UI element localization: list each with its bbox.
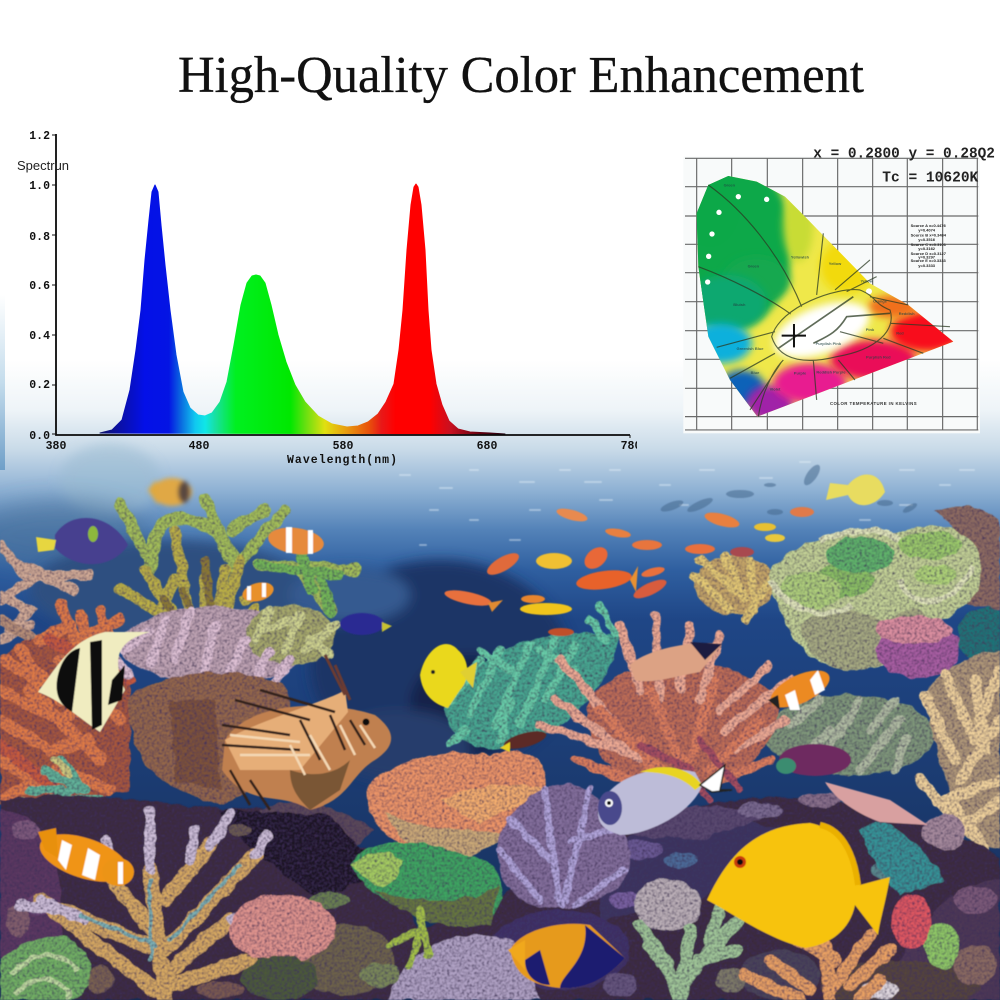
coral: teal right edge: [957, 607, 1000, 663]
left edge strip: [0, 295, 5, 470]
coral: green plate: [350, 842, 502, 926]
region names: Reddish: [899, 311, 915, 316]
coral: speckled mound: [634, 879, 702, 931]
coral: purple fan: [497, 784, 630, 909]
region names: Yellow: [829, 261, 842, 266]
y-axis labels: 0.8: [29, 231, 50, 244]
fish: rabbit fish: [630, 642, 722, 681]
fish: hawkfish: [825, 782, 928, 825]
coral: brown mass: [128, 672, 291, 805]
white-point cross: [782, 324, 806, 347]
coral: orange plate: [366, 752, 546, 856]
fish: anthias school: [443, 506, 814, 636]
coral: teal small: [30, 760, 100, 810]
illuminant list: Source B x=0.3484: [911, 233, 947, 238]
region names: Green: [748, 264, 760, 269]
y-axis labels: 1.2: [29, 130, 50, 143]
title: High-Quality Color Enhancement: [178, 47, 865, 104]
colour horseshoe: [696, 176, 954, 416]
region names: [724, 183, 915, 392]
white sample dots: [705, 194, 872, 294]
spectrum chart: [17, 130, 641, 467]
x-axis labels: 580: [333, 440, 353, 453]
coral: pale acropora: [20, 812, 268, 1000]
coral: orange branching left: [0, 632, 130, 810]
illuminant list: y=0.4074: [918, 228, 936, 233]
rock patches: [0, 802, 1000, 1000]
x-axis title: Wavelength(nm): [287, 454, 397, 467]
fish: moorish idol: [38, 632, 150, 732]
region names: Orange: [873, 299, 888, 304]
region names: Bluish: [733, 302, 746, 307]
coral: tan fingers right: [925, 650, 1000, 850]
coral: pink-orange branching: [540, 615, 790, 800]
fish: blue tang: [340, 613, 392, 635]
coral: green bottom ridges: [12, 956, 78, 998]
fish: powder blue tang: [598, 765, 732, 835]
y-axis ticks: [52, 135, 630, 438]
diagram grid: [685, 158, 978, 430]
fish: lionfish: [222, 655, 391, 810]
dark rock floor: [0, 796, 1000, 1000]
coral: pink-lilac table: [120, 607, 310, 683]
coral: yellow-tan small: [25, 760, 90, 820]
diagram paper: [683, 157, 980, 433]
fish: clown bottom left: [34, 825, 134, 891]
coral: large lettuce: [768, 526, 982, 670]
fish group: lively reef fish: [34, 475, 928, 988]
scene with soft photographic focus: [0, 475, 1000, 1000]
coral: green bottom: [0, 936, 90, 1000]
coral: pink brain: [229, 894, 335, 962]
coral: teal staghorn middle: [445, 633, 620, 750]
region names: Purple: [794, 370, 807, 375]
region names: Purplish Red: [866, 354, 891, 359]
colour temperature: Tc = 10620K: [882, 170, 979, 186]
fish: purple wrasse: [776, 744, 851, 776]
region names: Red: [896, 330, 904, 335]
y-axis title: Spectrun: [17, 158, 69, 173]
fish: clown right: [765, 663, 835, 715]
region names: Reddish Purple: [816, 369, 846, 374]
region names: Green: [724, 183, 736, 188]
coral: yellow-green staghorn: [120, 500, 355, 630]
fish: purple tang: [36, 518, 128, 564]
coral: light purple bottom: [388, 934, 540, 1000]
illuminant list: Source D x=0.3127: [911, 251, 947, 256]
x-axis labels: 780: [621, 440, 641, 453]
illuminant list: Source C x=0.3101: [911, 242, 947, 247]
y-axis labels: 0.0: [29, 430, 50, 443]
coral: red worm: [892, 894, 932, 950]
coral: left tan branches: [0, 545, 90, 640]
fish: small wrasse: [500, 728, 548, 752]
illuminant list: y=0.3333: [918, 263, 936, 268]
fish: yellow tang small: [420, 644, 477, 708]
fish: clown upper: [266, 524, 326, 558]
coral: green fingers: [640, 910, 738, 1000]
y-axis labels: 0.2: [29, 379, 50, 392]
x-axis labels: [46, 441, 637, 449]
spectrum curve: [100, 184, 505, 434]
region names: Yellowish: [791, 254, 810, 259]
coral: yellow tan: [695, 555, 775, 615]
x-axis labels: 680: [477, 440, 497, 453]
illuminant list: y=0.3162: [918, 246, 936, 251]
region names: Purplish Pink: [816, 341, 842, 346]
coral: teal-blue patch: [860, 822, 945, 895]
fish: orange distant: [148, 478, 192, 506]
coral: pink-purple right: [876, 622, 960, 678]
fish: blue-orange angelfish: [508, 924, 625, 988]
region names: Pink: [866, 327, 875, 332]
coral: yellow-green small: [390, 910, 428, 965]
y-axis labels: 0.4: [29, 330, 50, 343]
colour temperature scale: COLOR TEMPERATURE IN KELVINS: [830, 401, 917, 406]
coral: orange fingers: [745, 935, 890, 1000]
fish: pale yellow tang: [826, 475, 885, 505]
water glints and distant reef: [0, 444, 974, 569]
coral: bright green bottom right: [925, 921, 959, 969]
illuminant list: Source E x=0.3333: [911, 258, 947, 263]
coral: mauve polyps: [923, 814, 967, 850]
illuminant list: y=0.3297: [918, 255, 936, 260]
region names: Greenish Blue: [736, 346, 764, 351]
coral: tan brown upper right: [935, 507, 1000, 610]
region names: Yellow: [860, 279, 874, 284]
coral: grey-green: [765, 695, 935, 775]
reef foreground layer: [0, 784, 1000, 1000]
illuminant list: [911, 223, 947, 268]
colour region boundaries: [698, 185, 950, 417]
x-axis labels: 380: [46, 440, 66, 453]
CIE chromaticity diagram: [680, 146, 995, 433]
region names: Blue: [751, 370, 760, 375]
coral: dark urchin mound: [242, 956, 318, 1000]
y-axis labels: 1.0: [29, 180, 50, 193]
y-axis labels: 0.6: [29, 280, 50, 293]
dark blue background rock: [30, 540, 570, 780]
reef corals, back layer: [0, 500, 1000, 858]
floor colour flecks: [6, 792, 997, 1000]
fish: big yellow tang: [707, 823, 890, 948]
region names: Violet: [770, 387, 781, 392]
illuminant list: Source A x=0.4476: [911, 223, 946, 228]
fish: small clown: [240, 579, 276, 605]
axes: [56, 134, 630, 435]
x-axis labels: 480: [189, 440, 209, 453]
coordinates readout: x = 0.2800 y = 0.28Q2: [813, 146, 995, 162]
y-axis labels: [29, 130, 50, 443]
illuminant list: y=0.3516: [918, 237, 936, 242]
